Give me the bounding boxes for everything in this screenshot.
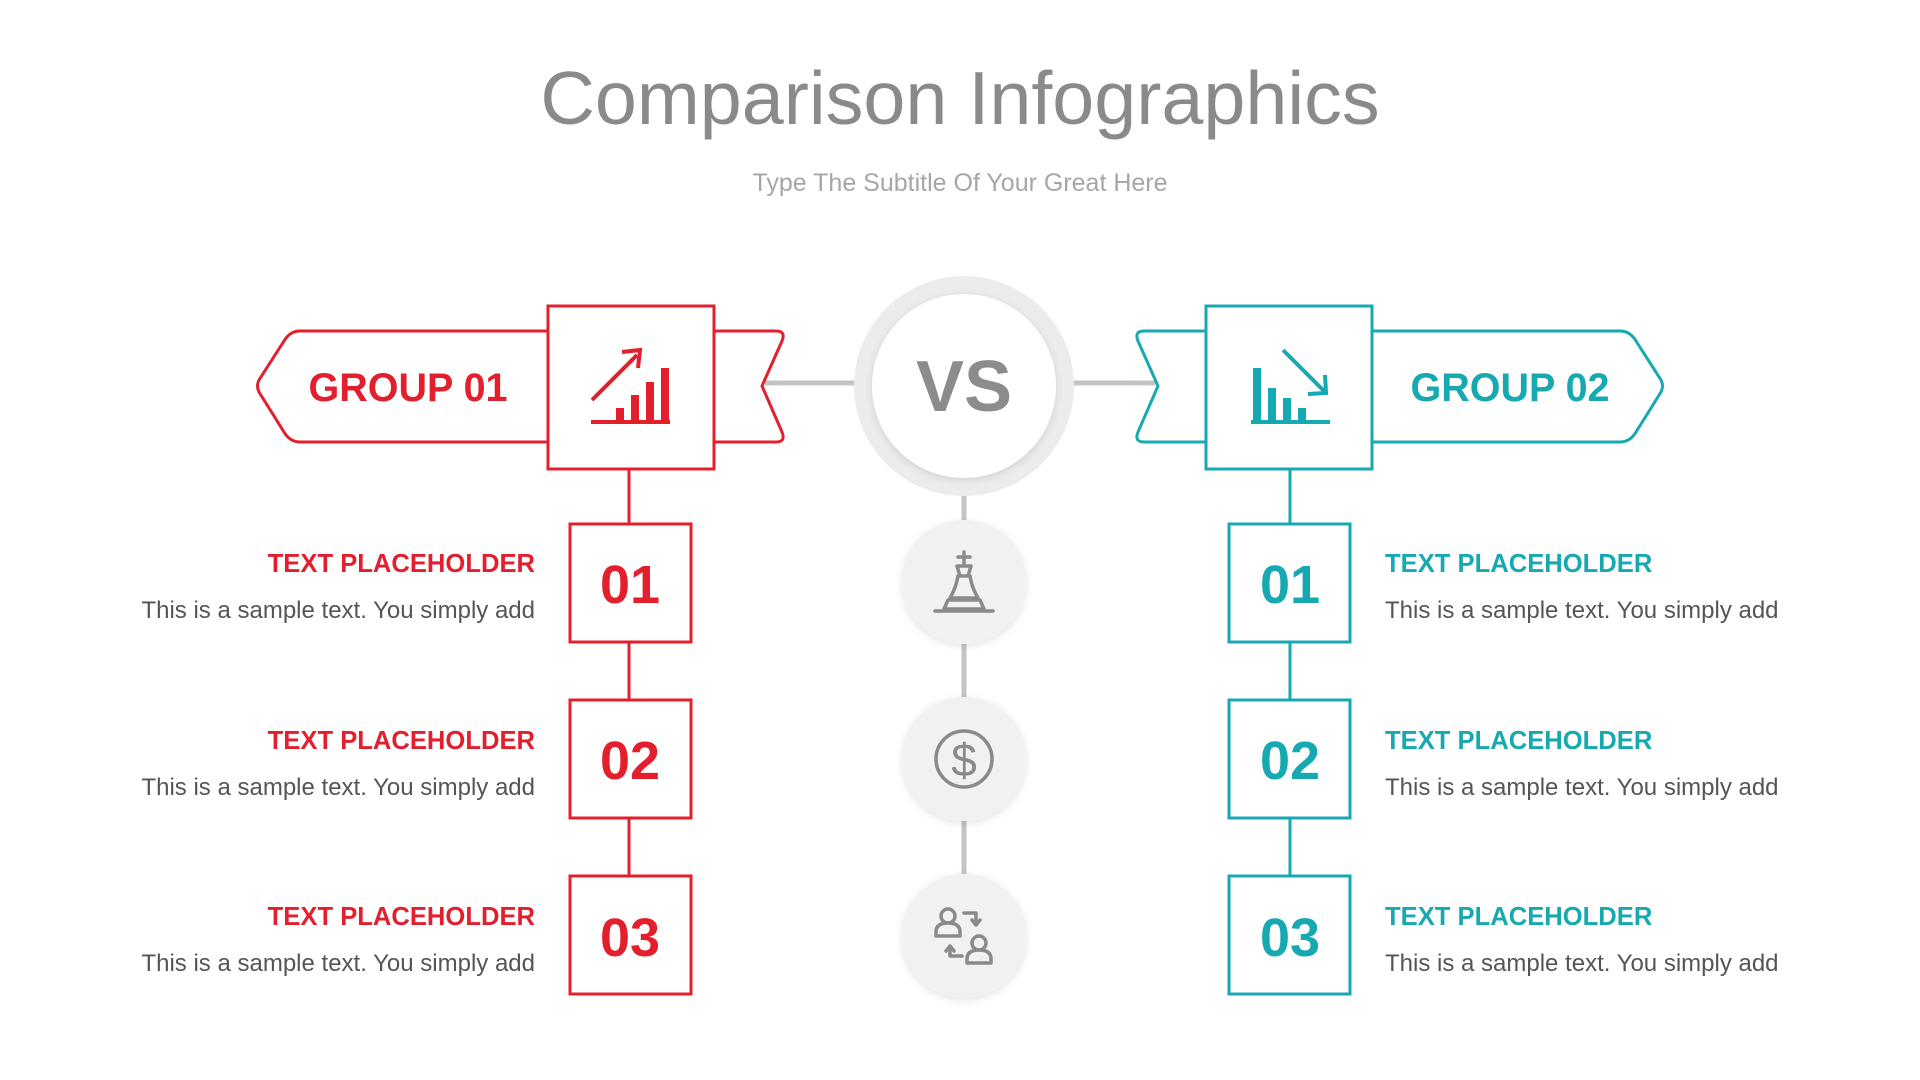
box 03 right: 03 xyxy=(1260,908,1320,968)
text block right 3: This is a sample text. You simply add xyxy=(1385,950,1779,977)
icon: dollar: $ xyxy=(951,734,977,786)
text block left 1: This is a sample text. You simply add xyxy=(141,597,535,624)
text block left 2 xyxy=(141,727,535,801)
box 01 right xyxy=(1229,524,1350,642)
text block right 3: TEXT PLACEHOLDER xyxy=(1385,903,1652,931)
icon: dollar xyxy=(902,697,1026,821)
text block left 3: This is a sample text. You simply add xyxy=(141,950,535,977)
text block right 1 xyxy=(1385,550,1779,624)
text block left 1: TEXT PLACEHOLDER xyxy=(268,550,535,578)
box 02: 02 xyxy=(600,731,660,791)
panel: group 02 xyxy=(1137,306,1779,994)
box 02 right: 02 xyxy=(1260,731,1320,791)
text block left 3: TEXT PLACEHOLDER xyxy=(268,903,535,931)
banner: group 02 xyxy=(1137,331,1662,442)
box 02 right xyxy=(1229,700,1350,818)
text block left 3 xyxy=(141,903,535,977)
title: Comparison Infographics xyxy=(540,56,1380,140)
box 01: 01 xyxy=(600,555,660,615)
text block right 2: TEXT PLACEHOLDER xyxy=(1385,727,1652,755)
box 01 xyxy=(570,524,691,642)
vertical connector left xyxy=(628,470,630,876)
vertical connector right xyxy=(1288,470,1292,876)
icon: falling chart xyxy=(1206,306,1372,469)
text block left 1 xyxy=(141,550,535,624)
banner: group 01 xyxy=(258,331,783,442)
text block right 1: This is a sample text. You simply add xyxy=(1385,597,1779,624)
box 01 right: 01 xyxy=(1260,555,1320,615)
text block right 1: TEXT PLACEHOLDER xyxy=(1385,550,1652,578)
heading: group 01: GROUP 01 xyxy=(308,366,508,410)
box 02 xyxy=(570,700,691,818)
box 03 xyxy=(570,876,691,994)
icon: rising chart xyxy=(548,306,714,470)
text block right 2: This is a sample text. You simply add xyxy=(1385,774,1779,801)
box 03 right xyxy=(1229,876,1350,994)
icon: people exchange xyxy=(902,874,1026,998)
subtitle: Type The Subtitle Of Your Great Here xyxy=(752,169,1168,197)
VS circle: VS xyxy=(916,347,1012,427)
heading: group 02: GROUP 02 xyxy=(1410,366,1610,410)
text block left 2: This is a sample text. You simply add xyxy=(141,774,535,801)
VS circle xyxy=(854,276,1074,496)
connector lines xyxy=(765,383,1155,900)
text block left 2: TEXT PLACEHOLDER xyxy=(268,727,535,755)
icon: chess king xyxy=(902,520,1026,644)
box 03: 03 xyxy=(600,908,660,968)
panel: group 01 xyxy=(141,306,783,994)
text block right 2 xyxy=(1385,727,1779,801)
text block right 3 xyxy=(1385,903,1779,977)
